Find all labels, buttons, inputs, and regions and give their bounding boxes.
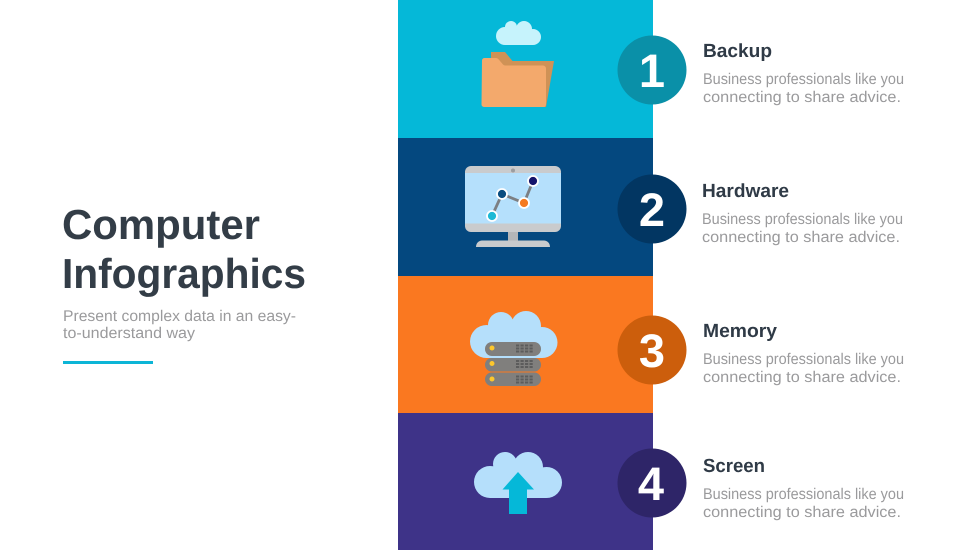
subtitle: to-understand way <box>63 325 195 342</box>
text block: backup <box>703 41 904 106</box>
text block: hardware <box>702 181 903 246</box>
title: Infographics <box>62 250 306 297</box>
text block: screen: Screen <box>703 456 765 477</box>
icon: cloud upload <box>474 452 562 514</box>
subtitle: Present complex data in an easy- <box>63 308 296 325</box>
text block: memory: Business professionals like you <box>703 351 904 368</box>
text block: hardware: Business professionals like you <box>702 211 903 228</box>
text block: backup: Backup <box>703 41 772 62</box>
text block: screen: connecting to share advice. <box>703 504 901 521</box>
text block: memory: connecting to share advice. <box>703 369 901 386</box>
icon: cloud server <box>470 311 558 386</box>
text block: hardware: connecting to share advice. <box>702 229 900 246</box>
number badge 3: 3 <box>639 324 665 377</box>
number badge 1 <box>618 36 686 104</box>
number badge 4 <box>618 448 686 518</box>
text block: backup: connecting to share advice. <box>703 89 901 106</box>
panel: hardware <box>398 138 653 276</box>
number badge 2: 2 <box>639 183 665 236</box>
panel: memory <box>398 276 653 413</box>
text block: hardware: Hardware <box>702 181 789 202</box>
number badge 4: 4 <box>638 457 664 510</box>
title <box>62 201 306 297</box>
icon: cloud and folder <box>482 21 554 107</box>
text block: memory: Memory <box>703 321 777 342</box>
icon: monitor with line chart <box>465 166 561 247</box>
text block: screen: Business professionals like you <box>703 486 904 503</box>
text block: backup: Business professionals like you <box>703 71 904 88</box>
number badge 1: 1 <box>639 44 665 97</box>
text block: memory <box>703 321 904 386</box>
number badge 2 <box>618 174 686 244</box>
number badge 3 <box>618 316 686 384</box>
subtitle <box>63 308 296 342</box>
text block: screen <box>703 456 904 521</box>
panel: backup <box>398 0 653 138</box>
accent underline <box>63 361 153 364</box>
title: Computer <box>62 201 260 248</box>
panel: screen <box>398 413 653 550</box>
